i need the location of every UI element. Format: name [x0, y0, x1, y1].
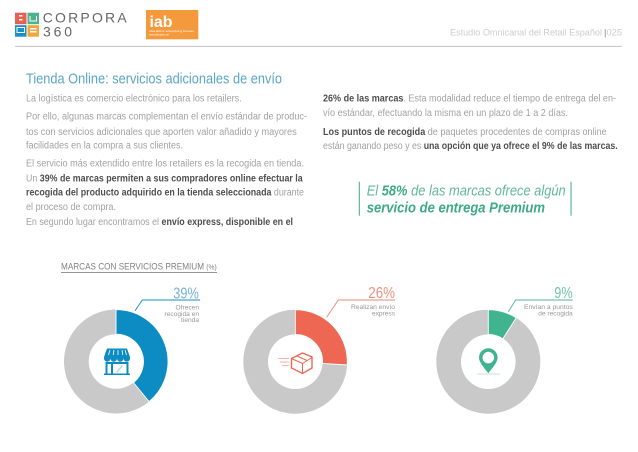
logo: Corpora 360: 360: [43, 24, 72, 40]
chart heading: MARCAS CON SERVICIOS PREMIUM (%): [61, 261, 217, 271]
icon: location pin: [477, 348, 500, 374]
logo: iab: www.iabspain.net: [149, 32, 169, 36]
description: recogida en: [165, 311, 199, 318]
text block: right column: 26% de las marcas. Esta modalidad reduce el tiempo de entrega del en-: [323, 94, 616, 105]
callout: servicio de entrega Premium: [367, 201, 545, 217]
description: express: [372, 310, 396, 317]
description: [351, 304, 396, 317]
text block: right column: [323, 94, 618, 152]
text block: left column: el proceso de compra.: [26, 202, 116, 213]
text block: left column: tos con servicios adicionales que aporten valor añadido y mayores: [26, 127, 297, 138]
value: 39%: [173, 285, 199, 302]
header: [15, 10, 622, 40]
report title and page number: 025: [606, 28, 622, 38]
logo: Corpora 360: [15, 10, 127, 40]
text block: right column: vío estándar, efectuando la misma en un plazo de 1 a 2 días.: [323, 108, 568, 119]
donut chart: 9% puntos de recogida: [436, 285, 573, 414]
text block: right column: están ganando peso y es una opción que ya ofrece el 9% de las marcas.: [323, 141, 618, 152]
text block: left column: Por ello, algunas marcas complementan el envío estándar de produc-: [26, 111, 307, 122]
leader line: [327, 300, 395, 317]
icon: store: [104, 348, 130, 375]
heading: Tienda Online: servicios adicionales de envío: [26, 70, 282, 87]
text block: left column: Un 39% de marcas permiten a sus compradores online efectuar la: [26, 173, 303, 184]
text block: left column: La logística es comercio electrónico para los retailers.: [26, 94, 242, 105]
text block: right column: Los puntos de recogida de paquetes procedentes de compras online: [323, 127, 607, 138]
description: Envían a puntos: [524, 304, 573, 311]
text block: left column: facilidades en la compra a sus clientes.: [26, 140, 183, 151]
logo: iab: interactive advertising bureau: [149, 29, 195, 33]
icon: delivery box: [278, 353, 312, 374]
text block: left column: El servicio más extendido entre los retailers es la recogida en tienda.: [26, 159, 304, 170]
logo: iab: [146, 10, 198, 39]
leader line: [508, 300, 573, 312]
donut chart: 39% recogida en tienda: [64, 285, 200, 414]
description: Ofrecen: [176, 304, 199, 312]
report title and page number: Estudio Omnicanal del Retail Español: [450, 28, 602, 38]
logo: iab: iab: [150, 14, 172, 31]
description: [524, 304, 573, 317]
logo: Corpora 360: CORPORA: [43, 10, 127, 26]
donut chart: 26% envío express: [243, 285, 396, 414]
text block: left column: En segundo lugar encontramos el envío express, disponible en el: [26, 217, 293, 228]
description: tienda: [181, 317, 199, 324]
value: 26%: [368, 285, 395, 302]
text block: left column: [26, 94, 307, 228]
text block: left column: recogida del producto adquirido en la tienda seleccionada durante: [26, 188, 304, 199]
description: [165, 304, 199, 324]
callout: [359, 182, 571, 217]
callout: El 58% de las marcas ofrece algún: [367, 184, 566, 200]
leader line: [135, 300, 200, 311]
description: de recogida: [538, 310, 573, 317]
report title and page number: |: [604, 28, 606, 38]
description: Realizan envío: [351, 304, 395, 311]
value: 9%: [554, 285, 573, 302]
